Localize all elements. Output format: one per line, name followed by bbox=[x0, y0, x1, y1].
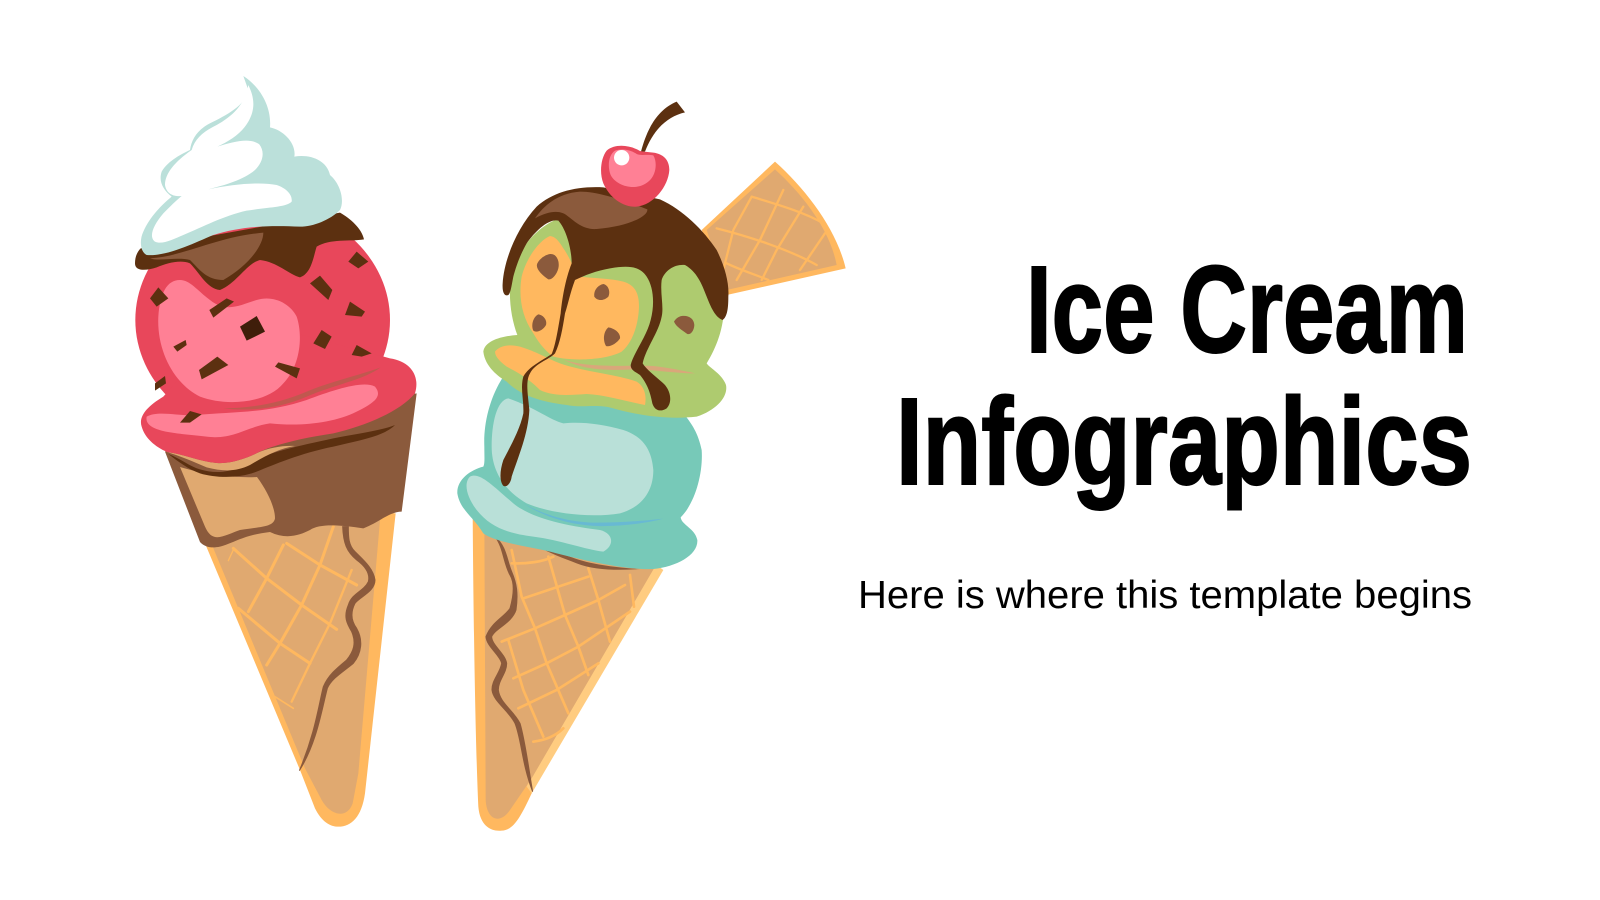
cherry bbox=[601, 146, 669, 207]
pistachio scoop bbox=[483, 220, 726, 418]
red scoop bbox=[135, 205, 416, 463]
illustration: pistachio and mint ice cream cone (right) bbox=[457, 102, 846, 831]
mint scoop bbox=[457, 377, 702, 569]
whipped cream bbox=[141, 76, 342, 255]
ice cream top: dipped rim, scoop, chocolate and whipped cream bbox=[135, 76, 417, 547]
wafer biscuit bbox=[702, 162, 846, 295]
subtitle: Here is where this template begins bbox=[858, 574, 1472, 617]
chocolate chips bbox=[150, 252, 372, 423]
chocolate sauce bbox=[135, 213, 364, 290]
cherry stem bbox=[641, 102, 685, 152]
illustration: strawberry ice cream cone (left) bbox=[135, 76, 417, 827]
waffle cone: right bbox=[473, 513, 663, 831]
waffle cone: left bbox=[205, 500, 396, 827]
scoops, sauce and cherry bbox=[457, 102, 728, 569]
title: Ice Cream bbox=[1026, 242, 1468, 379]
chocolate sauce drips bbox=[500, 187, 728, 486]
title bbox=[896, 242, 1472, 511]
